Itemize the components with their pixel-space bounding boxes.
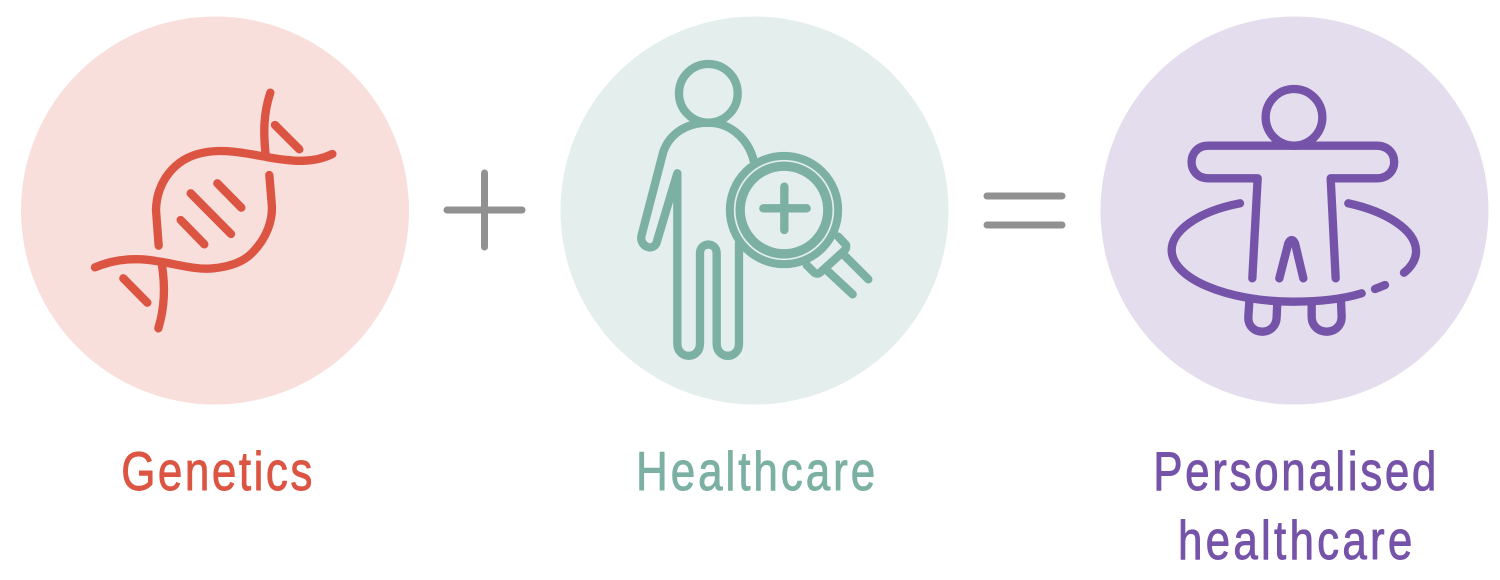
panel: genetics <box>21 16 409 502</box>
personalised healthcare label: healthcare <box>1178 509 1412 571</box>
panel: personalised healthcare <box>1100 16 1488 571</box>
personalised healthcare background circle <box>1100 16 1488 404</box>
icon: plus sign <box>447 173 522 247</box>
icon: person with magnifying glass <box>641 64 868 356</box>
genetics label: Genetics <box>121 440 312 502</box>
personalised healthcare label <box>1153 440 1436 571</box>
healthcare label: Healthcare <box>636 440 875 502</box>
personalised healthcare label: Personalised <box>1153 440 1436 502</box>
genetics background circle <box>21 16 409 404</box>
panel: healthcare <box>560 16 948 502</box>
icon: DNA helix <box>95 93 332 328</box>
healthcare background circle <box>560 16 948 404</box>
icon: person with hoop <box>1172 89 1416 332</box>
icon: equals sign <box>987 196 1062 225</box>
